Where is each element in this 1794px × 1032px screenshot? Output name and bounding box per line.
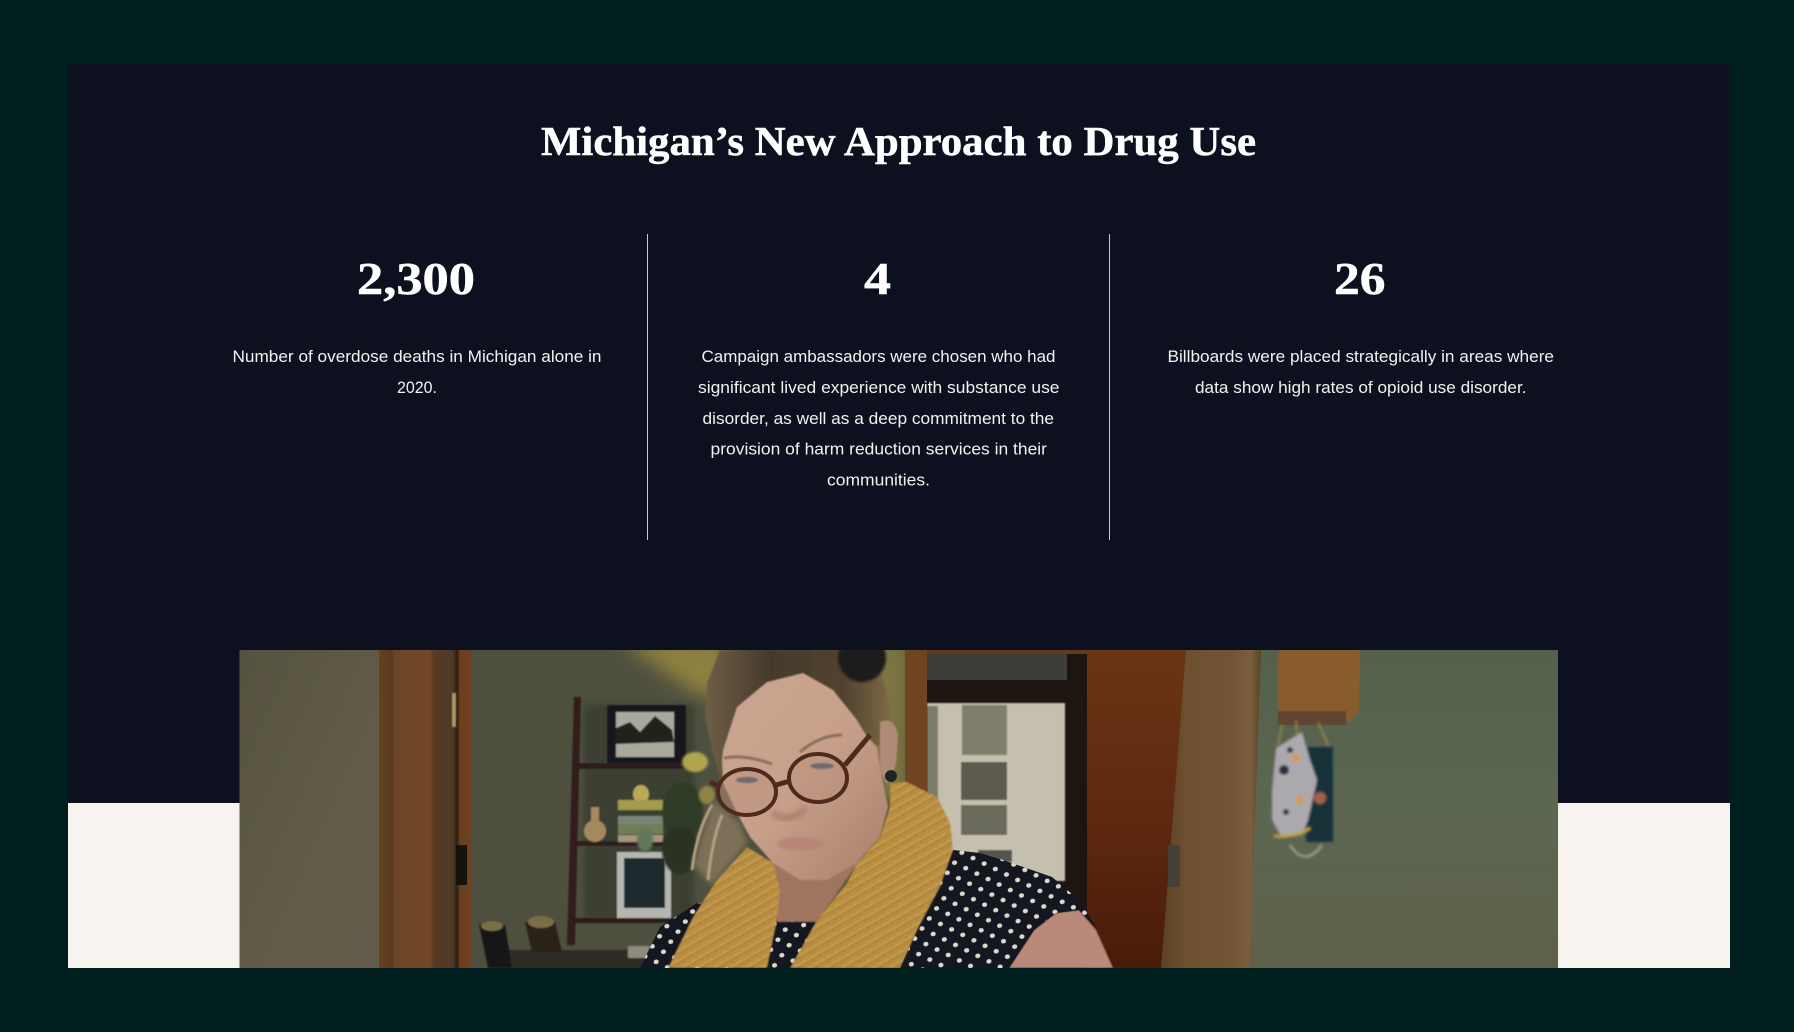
mouth [777,837,823,851]
room beyond right doorway [927,654,1087,968]
stat number: 4: 4 [864,253,891,304]
ear [880,721,898,784]
door hinge [456,845,467,885]
stat number: 26: 26 [1334,253,1386,304]
stat description: ambassadors: disorder, as well as a deep commitment to the [702,409,1054,428]
neck [770,860,860,922]
dark hair bun [836,650,888,684]
eye shadows [736,763,834,783]
eyebrows [724,735,842,764]
stat description: billboards: Billboards were placed strategically in areas where [1168,347,1554,366]
face [722,673,888,880]
stat description: billboards [1168,347,1554,397]
divider: left [647,234,648,540]
stat description: ambassadors: communities. [827,470,930,490]
framed picture [607,705,686,763]
yellow flowers and foliage [637,752,715,874]
wood plaque on wall [1278,650,1360,725]
left wall [239,650,380,968]
stat column: billboards [1168,253,1554,397]
warm glow behind head [620,640,910,800]
title: Michigan’s New Approach to Drug Use [541,118,1256,164]
left door jamb behind head [905,650,927,968]
cream block left [68,803,240,968]
loose blonde hair [693,800,747,885]
polka dot dress left and chest [640,903,830,968]
stat description: deaths [232,347,602,397]
cream block right [1558,803,1730,968]
glasses [710,735,870,815]
ceiling and lintel [927,654,1067,680]
framed photo on lower shelf [617,852,671,918]
books [633,785,649,803]
stat description: ambassadors [698,347,1060,490]
bookshelf [567,697,696,945]
stat description: billboards: data show high rates of opioid use disorder. [1195,378,1526,397]
door latch [1168,845,1180,887]
dining chairs and table [479,916,650,970]
blonde hair strands [692,805,722,880]
stat description: deaths: Number of overdose deaths in Michigan alone in [232,347,602,366]
stat description: deaths: 2020. [397,378,437,397]
stat description: ambassadors: Campaign ambassadors were chosen who had [702,347,1056,366]
vase [584,820,606,842]
hair [705,650,892,790]
bare arm [1009,910,1113,968]
nose shadow [772,808,806,818]
white cabinet [927,703,1065,881]
photo: woman with glasses and mustard scarf at home [239,634,1558,970]
wooden door frame right [1161,650,1261,968]
stat description: ambassadors: provision of harm reduction services in their [710,440,1047,458]
woman [640,634,1113,968]
polka dot dress right [900,850,1098,968]
stat column: overdose deaths [232,253,602,397]
middle wall [471,650,911,968]
scarf left [668,847,780,968]
divider: right [1109,234,1110,540]
earring [885,770,897,782]
hanging fabric mask [1272,720,1333,856]
stat description: ambassadors: significant lived experience with substance use [698,378,1060,397]
scarf right [790,782,953,968]
wooden door frame left [379,650,471,968]
stat column: campaign ambassadors [698,253,1060,490]
brass door highlight [452,693,456,727]
right green wall [1250,650,1558,968]
wooden door [1087,650,1190,968]
stat number: 2,300: 2,300 [357,253,475,304]
